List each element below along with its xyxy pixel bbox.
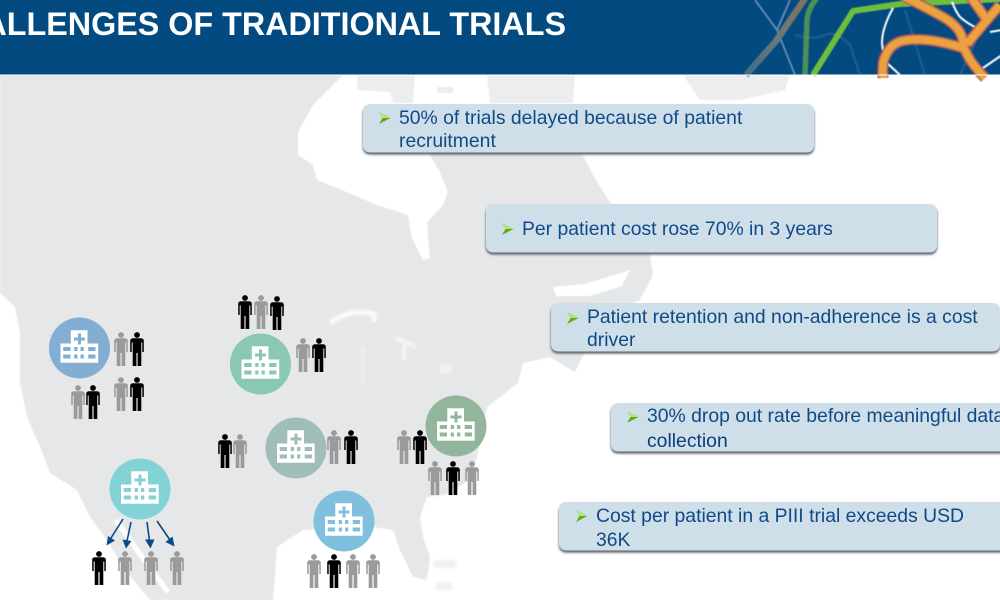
callout: drop out rate [611, 403, 1000, 454]
site 1: blue hospital with patients [49, 318, 144, 419]
callout: cost per patient: Cost per patient in a PIII trial exceeds USD [596, 505, 964, 527]
callout: retention and adherence: Patient retention and non-adherence is a cost [587, 306, 978, 328]
callout: retention and adherence: driver [587, 329, 636, 351]
callout: patient recruitment: 50% of trials delayed because of patient [399, 107, 743, 129]
site 4: sage hospital with patients [397, 396, 486, 495]
arrows to patients [106, 519, 174, 548]
site 3: grey-teal hospital with patients [218, 418, 358, 478]
callout: drop out rate: collection [647, 430, 728, 452]
callout: retention and adherence [551, 303, 1000, 354]
header banner [0, 0, 1000, 78]
callout: per patient cost [486, 204, 937, 254]
site 5: aqua hospital with arrows to patients [92, 458, 184, 585]
site 2: green hospital with patients [230, 295, 326, 394]
callout: patient recruitment [363, 104, 814, 154]
callout: patient recruitment: recruitment [399, 130, 496, 152]
decorative network art in header [746, 0, 1000, 78]
callout: drop out rate: 30% drop out rate before meaningful data [647, 405, 1000, 427]
callout: per patient cost: Per patient cost rose 70% in 3 years [522, 218, 833, 240]
site 6: sky-blue hospital with patients [307, 490, 380, 588]
background map of North America [0, 75, 790, 600]
callout: cost per patient [559, 502, 1000, 552]
callout: cost per patient: 36K [596, 529, 631, 551]
